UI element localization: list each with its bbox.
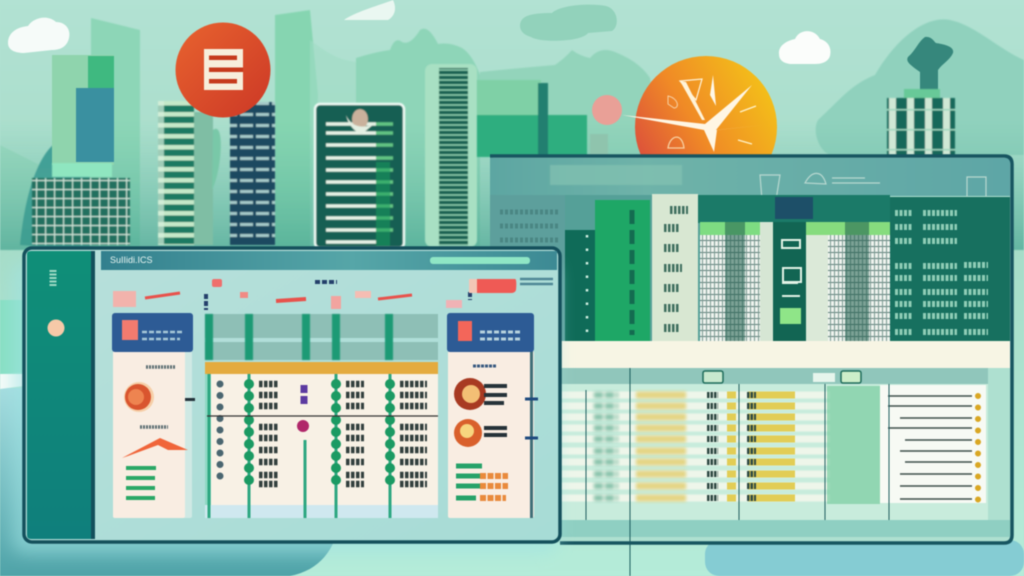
table footer bbox=[560, 520, 1010, 537]
icon: bulb two bbox=[454, 419, 482, 447]
header strip bbox=[101, 251, 557, 270]
background silhouettes: hills and far towers bbox=[0, 10, 1024, 250]
button tab bbox=[469, 279, 477, 293]
red button bbox=[477, 279, 516, 293]
cloud: top left bbox=[8, 18, 69, 53]
sidebar divider bbox=[91, 251, 95, 539]
card header lines bbox=[142, 332, 182, 339]
dark figures bbox=[707, 395, 756, 498]
card small label bbox=[140, 367, 176, 427]
label bbox=[473, 364, 497, 368]
avatar dot bbox=[48, 320, 64, 336]
icon: orange clock dial bbox=[622, 56, 777, 198]
navy tick marks bbox=[206, 282, 470, 310]
panel: right data window bbox=[490, 156, 1012, 576]
far building block: left bbox=[52, 55, 114, 165]
icon: ring bbox=[124, 382, 154, 412]
magenta marker bbox=[297, 420, 309, 432]
row figures bbox=[259, 384, 427, 484]
row rule bbox=[207, 415, 438, 417]
green column threads bbox=[209, 374, 390, 518]
panel: left dashboard window bbox=[12, 248, 560, 554]
sidebar marker bbox=[50, 270, 56, 286]
purple icons bbox=[300, 385, 308, 407]
building: navy tower bbox=[230, 102, 275, 245]
beige band bbox=[490, 341, 1010, 368]
cloud: white right bbox=[779, 31, 831, 64]
tablet with list bbox=[315, 104, 404, 248]
orange bars bbox=[480, 476, 508, 498]
building: tall rounded tower bbox=[425, 64, 477, 247]
table body bbox=[560, 384, 988, 520]
top strip bbox=[490, 158, 1010, 196]
right card bbox=[447, 313, 538, 518]
header pill bbox=[430, 257, 530, 264]
top-right mini lines bbox=[520, 279, 553, 284]
building: grid block with cap bbox=[32, 163, 130, 245]
sidebar bbox=[27, 251, 91, 539]
green column bars bbox=[209, 314, 389, 360]
smudged labels on gray column bbox=[500, 212, 560, 254]
green thumb bbox=[780, 308, 801, 324]
dots bbox=[586, 235, 588, 338]
dark teal upper band bbox=[698, 195, 890, 223]
dark data column bbox=[890, 197, 1010, 341]
green bars bbox=[126, 468, 156, 498]
gray column bbox=[490, 195, 565, 341]
tick bbox=[185, 398, 195, 401]
green smudges bbox=[594, 395, 618, 498]
card thumb bbox=[122, 320, 138, 340]
icon: bulb one bbox=[454, 378, 486, 410]
top strip lighter section bbox=[550, 165, 682, 185]
left card bbox=[112, 313, 195, 518]
building: striped tower bbox=[158, 101, 221, 245]
icon: red menu badge bbox=[176, 22, 270, 118]
lower left backdrop curve bbox=[0, 388, 340, 576]
statue on right tower bbox=[907, 37, 953, 90]
green translucent column bbox=[827, 386, 880, 504]
row icons bbox=[216, 384, 224, 485]
labels on pale column bbox=[664, 210, 688, 328]
list lines bbox=[888, 396, 972, 499]
list dots bbox=[975, 396, 981, 500]
cloud: darker right of centre bbox=[520, 5, 617, 41]
green column bbox=[595, 200, 650, 341]
building: green block behind right panel bbox=[477, 80, 608, 157]
card header lines bbox=[480, 332, 522, 339]
upper base band bbox=[490, 195, 890, 341]
window frame: top, right and bottom bbox=[490, 156, 1012, 543]
pale column bbox=[652, 194, 698, 341]
table header bbox=[560, 368, 988, 384]
light stripes bbox=[560, 395, 830, 498]
yellow strips bbox=[727, 395, 795, 498]
green row dots bbox=[249, 384, 390, 488]
data table B bbox=[806, 222, 828, 341]
building: right tower bbox=[887, 89, 955, 156]
red label smudges bbox=[113, 279, 462, 309]
marks on green column bbox=[630, 210, 634, 335]
mint glow at left edge bbox=[0, 300, 24, 374]
green bars bbox=[456, 466, 482, 498]
card thumb bbox=[458, 321, 472, 341]
icon: tripod arrow bbox=[122, 438, 188, 458]
header chips bbox=[703, 371, 861, 383]
small icons bbox=[782, 240, 801, 296]
dark green column bbox=[565, 230, 595, 341]
pale gap bbox=[760, 222, 773, 341]
lower right backdrop bbox=[705, 540, 1024, 576]
data table A bbox=[700, 222, 760, 341]
faint icons bbox=[760, 173, 986, 200]
light data rows bbox=[895, 213, 988, 332]
cloud: top centre bbox=[344, 0, 395, 20]
navy ticks bbox=[525, 399, 538, 438]
white band at left edge bbox=[0, 372, 24, 389]
window title: SuIIidi.ICS bbox=[110, 255, 153, 265]
bars two bbox=[484, 428, 507, 435]
bars one bbox=[484, 386, 507, 403]
center table bbox=[205, 314, 438, 518]
column rules bbox=[586, 368, 889, 576]
icon: pink dial knob bbox=[592, 95, 622, 125]
yellow band column bbox=[636, 395, 686, 498]
dark green icon column bbox=[773, 222, 806, 341]
white list area bbox=[880, 385, 986, 503]
